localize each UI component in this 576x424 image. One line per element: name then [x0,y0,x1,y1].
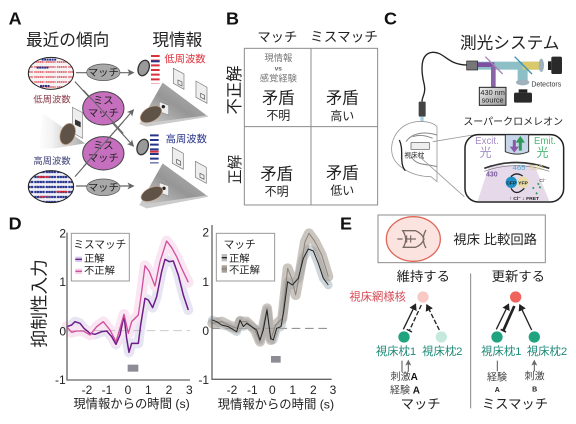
axes [67,233,190,380]
x tick labels: -1 [247,383,258,397]
matrix grid [244,48,378,205]
time bar [128,365,138,372]
row heading: incorrect: 不正解 [226,65,244,114]
optical fibre cable [422,52,467,102]
oval: mismatch bottom: マッチ [88,153,119,165]
cell: top right: 高い [330,109,354,123]
inputs: mismatch: 刺激 [525,369,545,382]
x tick labels: 1 [145,383,152,397]
cell: top left: 矛盾 [262,89,295,107]
panel letter E: E [340,213,352,233]
x tick labels: 1 [289,383,296,397]
label: match: マッチ [401,396,441,411]
panel C: photometry system [384,8,564,202]
inset: super chromeleon detail: ↑ Cl⁻ ↓ FRET [509,196,539,202]
oval: match top [87,64,120,81]
panel letter C: C [384,8,397,28]
labels: pulvinar nuclei [376,344,567,358]
header box: thalamic comparison circuit: 視床 比較回路 [453,232,537,247]
oval: match top: マッチ [88,67,119,79]
legend: mismatch: ミスマッチ [73,239,126,251]
curve: correct [67,259,188,352]
legend: match: 正解 [229,252,250,265]
x tick labels: -2 [227,383,238,397]
cell: top left: 不明 [266,108,290,122]
cell: bottom left: 不明 [265,184,289,198]
circuit: mismatch [491,291,540,343]
zoom lines from brain to inset [418,135,473,197]
divider [469,273,472,408]
inset: super chromeleon detail: Excit. [475,136,499,147]
cell: bottom right: 矛盾 [326,164,359,182]
panel E: thalamic comparison circuit [340,213,567,411]
panel D left: mismatch chart [9,213,193,411]
y tick labels: 1 [202,275,209,289]
x tick labels: 2 [166,383,173,397]
legend: match: 不正解 [229,263,260,276]
panel D right: match chart [198,225,337,411]
label: low frequency current: 低周波数 [164,52,206,65]
brain section: 視床枕 [404,151,425,160]
legend: mismatch [71,233,129,281]
cell: top left [260,52,298,122]
x axis title: 現情報からの時間 (s) [73,397,190,411]
inputs: match [390,361,420,396]
legend: match [216,233,275,281]
inputs: mismatch [487,361,545,394]
x tick labels [227,383,337,397]
chamber: bottom right [139,147,208,208]
heading: maintain: 維持する [397,269,450,284]
y tick labels: -1 [55,373,66,387]
curve: correct [212,249,328,340]
y tick labels: 1 [59,275,66,289]
oval: mismatch top: ミス [93,96,114,107]
zero dashed line [67,329,190,332]
label: super chromeleon: スーパークロメレオン [463,116,563,128]
brain section [392,121,437,182]
panel A: recent trend and current information [9,8,208,208]
y tick labels: 2 [59,226,66,240]
circuit: match [398,291,447,343]
inputs: mismatch: 経験 [487,370,507,383]
panel letter A: A [9,8,22,28]
inputs: match: 経験 A [390,383,420,396]
lens and camera right [539,57,562,74]
inset: super chromeleon detail: CFP [506,180,517,186]
cell: bottom left: 矛盾 [260,165,293,183]
heading: recent trend: 最近の傾向 [26,30,109,49]
x tick labels: 2 [310,383,317,397]
axes [212,225,332,379]
inset: super chromeleon detail: 光 [537,146,549,160]
y tick labels: 2 [202,226,209,240]
x tick labels: 3 [330,383,337,397]
cell: bottom left [260,165,293,198]
confidence bands [67,241,188,352]
y tick labels: -1 [198,373,209,387]
panel letter B: B [226,8,239,28]
oval: mismatch top [83,92,124,125]
heading: update: 更新する [492,269,545,284]
oval: mismatch bottom [83,137,124,170]
cell: top left: vs [275,66,282,73]
inputs: mismatch: A [495,387,500,394]
inset: super chromeleon detail: 430 [486,172,498,179]
implant [419,102,426,142]
zero dashed line [212,327,332,330]
cell: bottom right [326,164,359,197]
inputs: mismatch: B [532,386,537,393]
icon: speaker bottom with blue pulses [135,134,159,163]
inset: super chromeleon detail: YFP [518,180,529,186]
cell: top right [326,89,359,123]
x tick labels: -1 [102,383,113,397]
lens and camera bottom [514,79,532,103]
label: detectors: Detectors [531,82,562,89]
box: 430 nm source: source [482,95,504,104]
cell: bottom right: 低い [330,183,354,197]
labels: pulvinar nuclei: 視床枕1 [376,344,416,358]
panel B: contradiction matrix [226,8,378,205]
cell: top right: 矛盾 [326,89,359,107]
y tick labels: 0 [59,324,66,338]
x tick labels: -2 [82,383,93,397]
panel letter D: D [9,213,22,233]
label: high frequency current: 高周波数 [166,133,208,146]
inset: super chromeleon detail: 465 [513,163,525,172]
chamber: left mouse [38,107,85,148]
oval: match bottom: マッチ [88,182,119,194]
inset: super chromeleon detail: 光 [480,146,492,160]
oval: mismatch top: マッチ [88,108,119,120]
heading: photometry system: 測光システム [460,33,559,52]
y tick labels: 0 [202,324,209,338]
heading: current information: 現情報 [152,30,203,49]
inset: super chromeleon detail [465,135,564,202]
legend: mismatch: 正解 [84,252,105,265]
column heading: mismatch: ミスマッチ [310,30,378,45]
curve: incorrect [67,241,188,342]
stimulus ellipse: low frequency [28,57,74,89]
cell: top left: 現情報 [264,52,293,63]
y axis title: 抑制性入力 [30,259,50,347]
legend: match: マッチ [224,239,256,251]
label: low frequency: 低周波数 [33,93,71,104]
oval: match bottom [87,179,120,196]
labels: pulvinar nuclei: 視床枕2 [527,344,567,358]
stimulus ellipse: high frequency [28,171,74,203]
time bar [271,356,281,363]
cell: top left: 感覚経験 [260,73,298,84]
x axis title: 現情報からの時間 (s) [218,397,334,411]
column heading: match: マッチ [257,30,297,45]
x tick labels [82,383,193,397]
labels: pulvinar nuclei: 視床枕1 [481,344,521,358]
label: mismatch: ミスマッチ [482,396,548,411]
label: thalamic reticular nucleus: 視床網様核 [349,290,406,304]
arrows between trend and current information [75,73,133,186]
inset: super chromeleon detail: 530 [530,163,543,172]
confidence bands [212,233,328,342]
legend: mismatch: 不正解 [84,264,115,277]
inset: super chromeleon detail: Emit. [534,136,556,147]
fibre coupler [467,61,478,70]
x tick labels: 0 [269,383,276,397]
label: high frequency: 高周波数 [33,155,71,166]
header box: thalamic comparison circuit [378,215,545,263]
oval: mismatch bottom: ミス [93,141,114,152]
curve: incorrect [212,233,328,342]
y tick labels [55,226,66,387]
arrow overlay across mismatch ovals [83,90,123,167]
labels: pulvinar nuclei: 視床枕2 [422,344,462,358]
row heading: correct: 正解 [227,154,244,184]
box: 430 nm source: 430 nm [480,88,505,97]
inputs: match: 刺激A [391,370,418,383]
icon: speaker top with red pulses [136,55,160,83]
x tick labels: 0 [125,383,132,397]
optical beam paths [478,57,543,87]
chamber: top right [137,68,208,127]
y tick labels [198,226,209,387]
x tick labels: 3 [186,383,193,397]
box: 430 nm source [479,87,506,105]
inset: super chromeleon detail: Cl⁻ [539,178,547,183]
